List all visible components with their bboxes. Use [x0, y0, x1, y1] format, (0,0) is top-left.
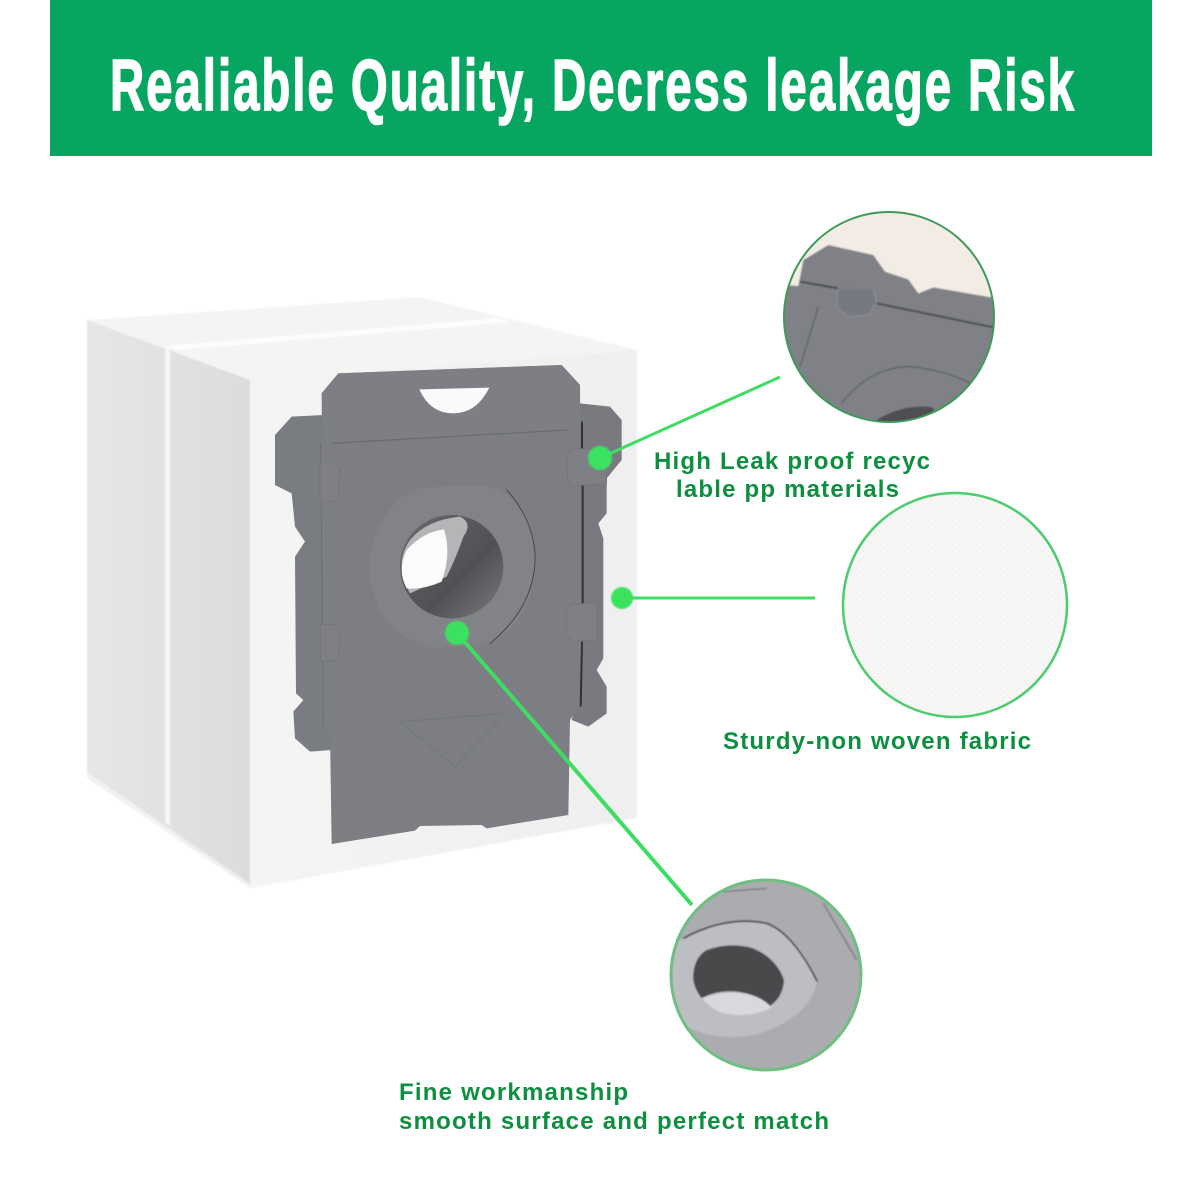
dot: collar clip — [588, 446, 612, 470]
hang notch — [419, 388, 489, 413]
dot: fabric — [611, 587, 633, 609]
callout line: collar clip — [600, 377, 780, 458]
product: dust bag — [87, 297, 637, 888]
callout line: port — [457, 633, 692, 905]
left wing — [275, 415, 332, 752]
grey collar plate — [275, 365, 622, 844]
label: workmanship — [399, 1079, 829, 1135]
down arrow mark — [400, 713, 505, 767]
top flap — [322, 365, 580, 443]
callout line: fabric — [622, 596, 815, 600]
label: collar material: High Leak proof recyc — [654, 448, 930, 475]
detail circle: port close-up — [665, 875, 865, 1075]
clips — [567, 449, 607, 486]
dot: port — [445, 621, 469, 645]
main plate — [322, 365, 582, 844]
label: fabric: Sturdy-non woven fabric — [723, 728, 1031, 755]
detail circle: collar close-up — [777, 210, 1000, 430]
port ring — [369, 485, 535, 648]
label: collar material: lable pp materials — [676, 476, 899, 503]
label: workmanship: smooth surface and perfect match — [399, 1108, 829, 1135]
bag body — [87, 297, 637, 888]
header banner — [50, 0, 1152, 156]
detail circle: non-woven fabric — [843, 493, 1067, 717]
port hole — [400, 515, 503, 618]
label: workmanship: Fine workmanship — [399, 1079, 628, 1106]
right seam — [581, 422, 583, 707]
right wing — [572, 403, 622, 727]
label: collar material — [654, 448, 930, 503]
